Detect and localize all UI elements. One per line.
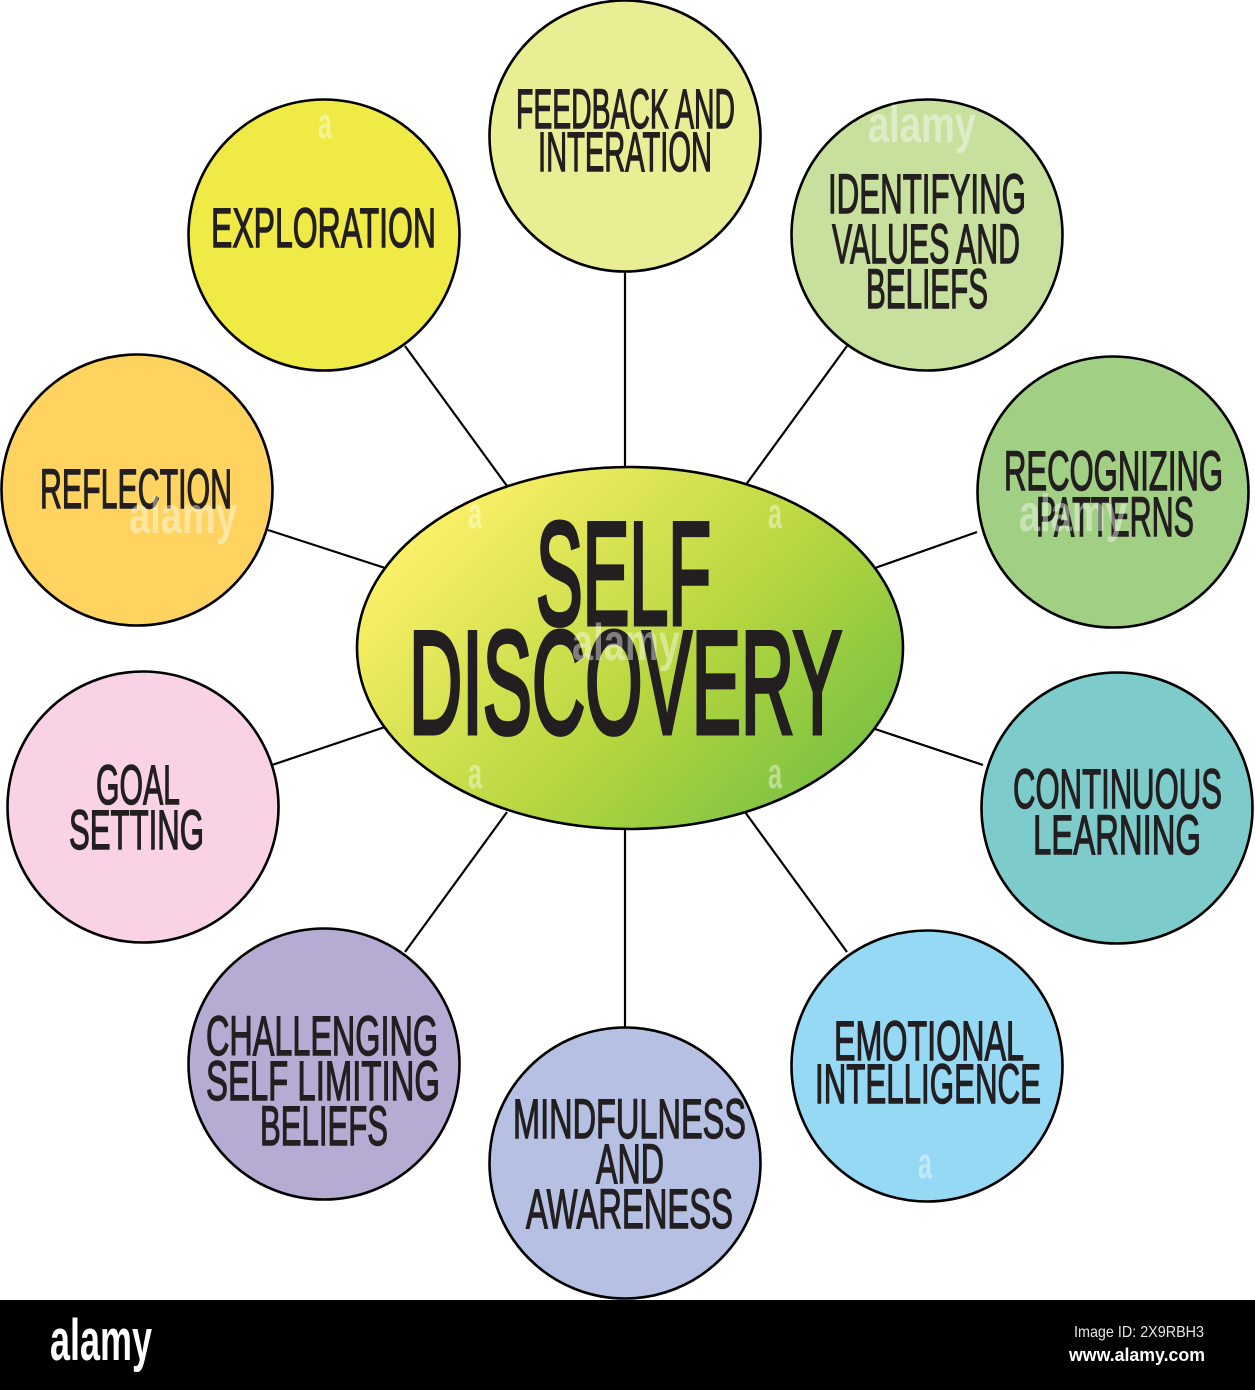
central ellipse: self discovery: DISCOVERY	[409, 601, 842, 764]
node: feedback and iteration: FEEDBACK AND	[516, 77, 735, 140]
node: challenging self limiting beliefs: CHALLENGING	[206, 1004, 438, 1067]
watermarks	[129, 96, 1127, 1188]
watermarks: alamy	[129, 487, 237, 545]
node: mindfulness and awareness: AND	[596, 1132, 664, 1195]
connector lines	[268, 272, 983, 1028]
node: mindfulness and awareness	[490, 1028, 760, 1298]
central ellipse: self discovery: SELF	[536, 492, 711, 655]
node: recognizing patterns	[978, 356, 1248, 628]
node: goal setting	[8, 672, 278, 942]
watermarks: a	[468, 489, 482, 538]
node: identifying values and beliefs	[792, 100, 1062, 370]
node: identifying values and beliefs: BELIEFS	[866, 257, 988, 320]
footer bar	[0, 1300, 1255, 1390]
node: identifying values and beliefs: IDENTIFYING	[828, 162, 1026, 225]
node: goal setting: SETTING	[69, 798, 204, 861]
watermarks: a	[318, 99, 332, 148]
watermarks: alamy	[572, 614, 680, 672]
node: challenging self limiting beliefs: BELIEFS	[260, 1094, 388, 1157]
central ellipse: self discovery	[357, 467, 903, 829]
watermarks: a	[768, 749, 782, 798]
watermarks: alamy	[1019, 485, 1127, 543]
footer logo: alamy	[50, 1308, 152, 1373]
node: exploration: EXPLORATION	[211, 196, 436, 259]
website: www.alamy.com	[1068, 1345, 1205, 1365]
node: challenging self limiting beliefs	[188, 928, 460, 1200]
node: challenging self limiting beliefs: SELF LIMITING	[206, 1049, 440, 1112]
watermarks: a	[768, 489, 782, 538]
node: identifying values and beliefs: VALUES AND	[832, 212, 1020, 275]
watermarks: a	[918, 1139, 932, 1188]
node: goal setting: GOAL	[96, 753, 180, 816]
node: continuous learning	[982, 672, 1252, 944]
watermarks: a	[468, 749, 482, 798]
node: feedback and iteration	[490, 0, 760, 272]
node: feedback and iteration: INTERATION	[538, 120, 712, 183]
node: mindfulness and awareness: AWARENESS	[526, 1177, 733, 1240]
watermarks: alamy	[868, 96, 976, 154]
node: reflection	[2, 354, 272, 626]
node: emotional intelligence	[792, 930, 1062, 1202]
node: reflection: REFLECTION	[40, 457, 232, 520]
node: emotional intelligence: INTELLIGENCE	[815, 1052, 1041, 1115]
image id: Image ID: 2X9RBH3	[1074, 1324, 1204, 1341]
node: exploration	[188, 100, 460, 370]
node: mindfulness and awareness: MINDFULNESS	[513, 1087, 746, 1150]
node: emotional intelligence: EMOTIONAL	[834, 1009, 1024, 1072]
